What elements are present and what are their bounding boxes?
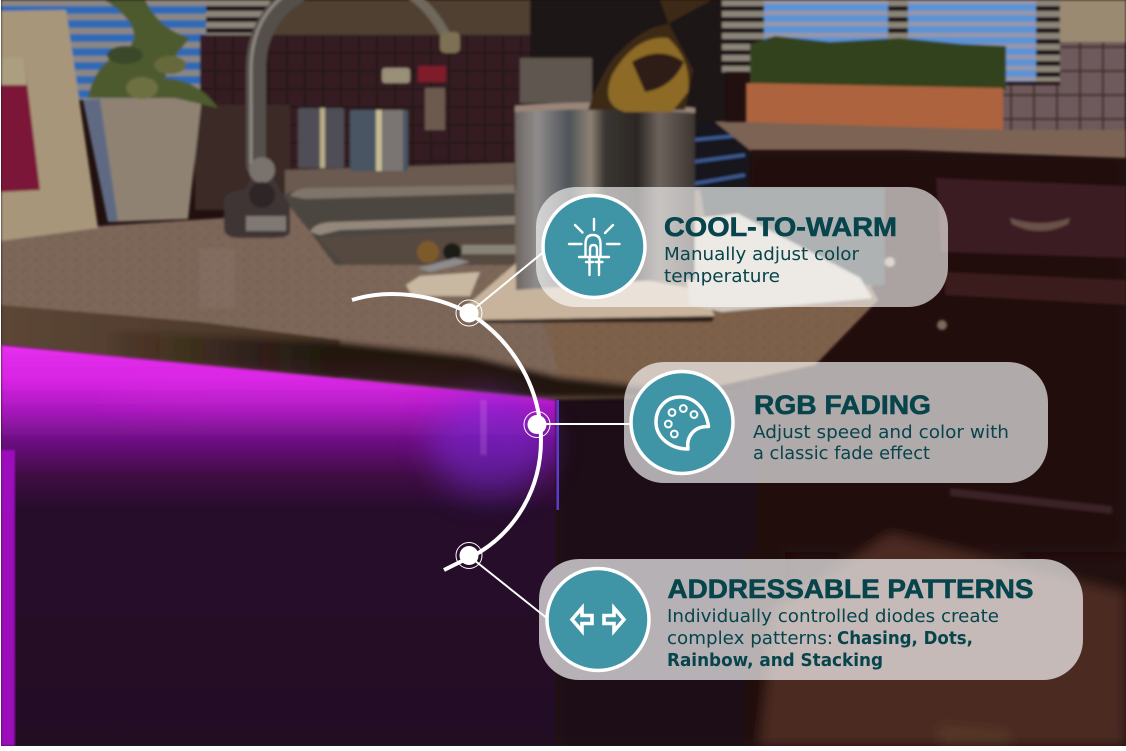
heading: addressable patterns: ADDRESSABLE PATTERNS xyxy=(668,574,1034,604)
icon: LED diode xyxy=(543,196,645,298)
text: rgb fading description: a classic fade effect xyxy=(753,444,930,464)
towel and paper xyxy=(406,258,715,323)
upper dark region behind bottle xyxy=(530,0,725,125)
text: addressable patterns description: complex patterns: xyxy=(667,629,833,649)
faucet base xyxy=(224,155,290,238)
light paper behind first panel xyxy=(680,214,872,312)
window blinds, left xyxy=(1,0,290,105)
icon: left and right arrows xyxy=(547,568,649,670)
back counter right xyxy=(715,122,1126,158)
counter corner warmer tone xyxy=(540,285,878,392)
connector line: node 2 to rgb fading xyxy=(537,423,632,425)
text: addressable patterns description: Rainbow, and Stacking xyxy=(667,651,883,671)
stove front behind first panel xyxy=(695,188,885,302)
keys xyxy=(417,241,517,272)
grass in planter xyxy=(750,36,1006,90)
node 3 xyxy=(456,542,482,568)
counter front edge xyxy=(1,305,340,380)
plant pot xyxy=(83,97,202,222)
counter shadow band xyxy=(100,330,690,398)
text: cool-to-warm description: Manually adjust color xyxy=(664,245,860,265)
panel: rgb fading xyxy=(624,362,1048,483)
bottle xyxy=(588,0,712,112)
cabinet door rail xyxy=(945,272,1126,305)
right window blinds xyxy=(722,0,1060,82)
beige wall and tile, right xyxy=(1060,0,1126,42)
picture frame xyxy=(1,10,98,241)
stove xyxy=(692,122,752,200)
plant xyxy=(88,0,218,108)
faucet xyxy=(251,0,449,165)
steel cups xyxy=(298,66,446,171)
panel: cool-to-warm xyxy=(536,187,948,307)
counter reflection xyxy=(200,248,235,308)
node 1 xyxy=(456,300,482,326)
text: addressable patterns description: Individually controlled diodes create xyxy=(667,607,999,627)
node 2 xyxy=(524,412,550,438)
text: cool-to-warm description: temperature xyxy=(664,267,780,287)
text: addressable patterns description: Chasing, Dots, xyxy=(837,629,973,649)
counter top xyxy=(1,190,878,400)
orange planter xyxy=(746,83,1003,130)
purple LED glow wall xyxy=(1,345,559,746)
text: rgb fading description: Adjust speed and color with xyxy=(753,423,1009,443)
panel: addressable patterns xyxy=(539,559,1083,680)
wall above backsplash xyxy=(270,0,530,38)
backsplash tiles xyxy=(200,35,530,175)
connector line: node 1 to cool-to-warm xyxy=(469,250,546,313)
sink xyxy=(283,185,515,265)
steel bucket xyxy=(515,102,695,290)
heading: rgb fading: RGB FADING xyxy=(754,390,931,420)
cabinets right xyxy=(556,152,1126,746)
connector line: node 3 to addressable patterns xyxy=(469,556,548,619)
back counter strip xyxy=(285,163,515,200)
connector arc with nodes xyxy=(352,250,632,619)
heading: cool-to-warm: COOL-TO-WARM xyxy=(664,212,897,242)
drawer xyxy=(936,178,1126,258)
text: addressable patterns description xyxy=(667,607,999,671)
icon: paint palette xyxy=(631,372,733,474)
lower rail xyxy=(950,488,1112,514)
floor xyxy=(760,534,1126,746)
